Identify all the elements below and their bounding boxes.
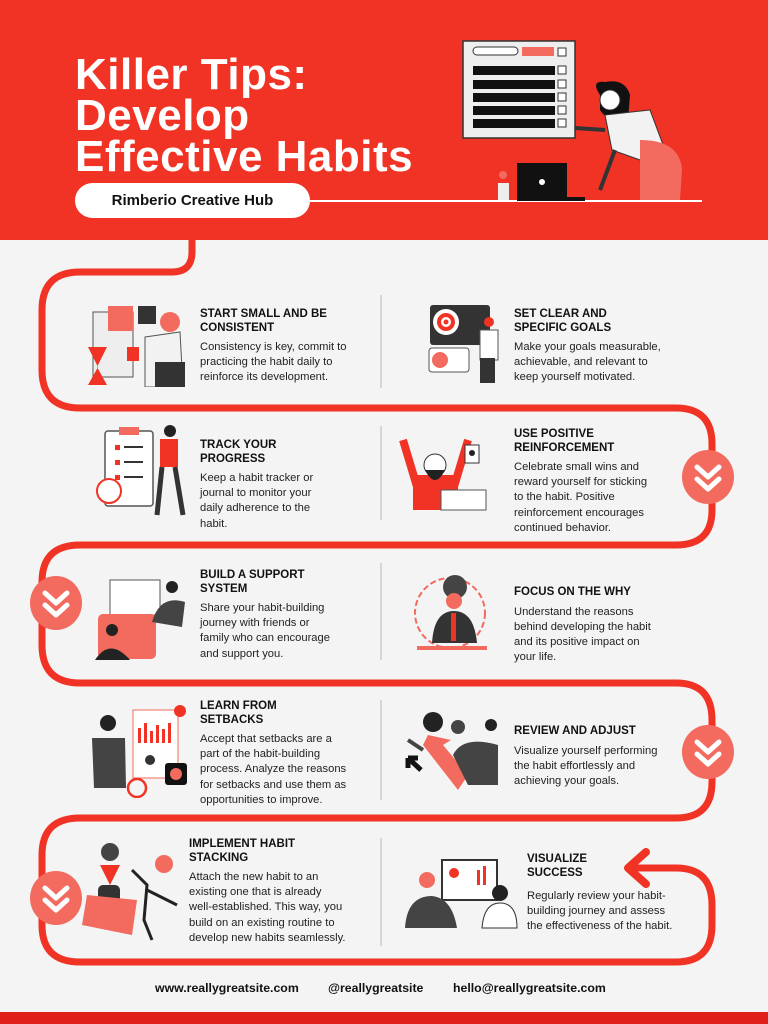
header illustration: woman with checklist board: [310, 40, 702, 202]
footer contacts: @reallygreatsite: [328, 981, 423, 995]
tip: visualize success: Regularly review your habit-: [527, 890, 666, 902]
subtitle pill: Rimberio Creative Hub: [112, 192, 273, 209]
subtitle pill: [75, 183, 310, 218]
tip: review and adjust: [514, 725, 657, 787]
footer contacts: [155, 981, 606, 995]
title: Killer Tips:: [75, 50, 308, 99]
tip: start small: reinforce its development.: [200, 371, 328, 383]
illustration: review and adjust: [406, 712, 498, 790]
tip: track progress: PROGRESS: [200, 452, 265, 464]
tip: support system: and support you.: [200, 648, 283, 660]
tip: positive reinforcement: REINFORCEMENT: [514, 442, 614, 454]
tip: visualize success: the effectiveness of the habit.: [527, 920, 672, 932]
tip: review and adjust: Visualize yourself performing: [514, 744, 657, 756]
tip: positive reinforcement: continued behavior.: [514, 522, 611, 534]
tip: focus on why: your life.: [514, 651, 556, 663]
footer contacts: hello@reallygreatsite.com: [453, 981, 606, 995]
tip: review and adjust: REVIEW AND ADJUST: [514, 725, 636, 737]
tip: track progress: [200, 439, 314, 530]
tip: support system: family who can encourage: [200, 632, 330, 644]
tip: positive reinforcement: USE POSITIVE: [514, 428, 594, 440]
title: Develop: [75, 91, 250, 140]
tip: positive reinforcement: to the habit. Positive: [514, 491, 615, 503]
icon: chevron circle 3: [682, 725, 734, 779]
tip: learn from setbacks: opportunities to improve.: [200, 794, 323, 806]
tip: support system: Share your habit-building: [200, 602, 324, 614]
icon: chevron circle 1: [682, 450, 734, 504]
tip: review and adjust: achieving your goals.: [514, 775, 619, 787]
tip: support system: BUILD A SUPPORT: [200, 569, 305, 581]
tip: habit stacking: well-established. This way, you: [189, 901, 342, 913]
tip: focus on why: and its positive impact on: [514, 636, 640, 648]
tip: set clear goals: achievable, and relevant to: [514, 356, 648, 368]
tip: habit stacking: build on an existing routine to: [189, 917, 335, 929]
tip: support system: [200, 569, 330, 660]
tip: track progress: journal to monitor your: [200, 487, 311, 499]
tip: set clear goals: SPECIFIC GOALS: [514, 322, 611, 334]
tip: set clear goals: SET CLEAR AND: [514, 308, 607, 320]
tip: start small: CONSISTENT: [200, 322, 274, 334]
tip: track progress: Keep a habit tracker or: [200, 472, 313, 484]
tip: learn from setbacks: LEARN FROM: [200, 700, 277, 712]
illustration: support system: [95, 580, 185, 660]
tip: focus on why: [514, 586, 651, 663]
tip: learn from setbacks: for setbacks and use them as: [200, 779, 346, 791]
tip: habit stacking: Attach the new habit to an: [189, 871, 318, 883]
title: Effective Habits: [75, 132, 413, 181]
tip: learn from setbacks: [200, 700, 346, 806]
illustration: track progress: [96, 425, 186, 516]
header background: [0, 0, 768, 240]
tip: habit stacking: IMPLEMENT HABIT: [189, 838, 295, 850]
illustration: set clear goals: [428, 305, 498, 383]
tip: start small: Consistency is key, commit to: [200, 341, 347, 353]
tip: positive reinforcement: [514, 428, 647, 534]
tip: focus on why: FOCUS ON THE WHY: [514, 586, 631, 598]
illustration: visualize success: [405, 859, 518, 928]
tip: visualize success: VISUALIZE: [527, 853, 587, 865]
icon: chevron circle 2: [30, 576, 82, 630]
tip: visualize success: [527, 853, 672, 932]
tip: focus on why: Understand the reasons: [514, 606, 633, 618]
tip: set clear goals: [514, 308, 661, 383]
tip: focus on why: behind developing the habit: [514, 621, 651, 633]
footer bar: [0, 1012, 768, 1024]
tip: set clear goals: Make your goals measurable,: [514, 341, 661, 353]
tip: learn from setbacks: Accept that setbacks are a: [200, 733, 332, 745]
tip: visualize success: SUCCESS: [527, 866, 583, 878]
illustration: positive reinforcement: [399, 438, 486, 510]
title: [75, 50, 413, 181]
tip: support system: SYSTEM: [200, 582, 247, 594]
tip: positive reinforcement: reinforcement encourages: [514, 507, 644, 519]
illustration: start small: [88, 306, 185, 387]
tip: support system: journey with friends or: [200, 617, 309, 629]
tip: habit stacking: develop new habits seamlessly.: [189, 932, 346, 944]
tip: set clear goals: keep yourself motivated.: [514, 371, 635, 383]
icon: chevron circle 4: [30, 871, 82, 925]
tip: visualize success: building journey and assess: [527, 905, 665, 917]
tip: habit stacking: STACKING: [189, 852, 248, 864]
tip: learn from setbacks: process. Analyze the reasons: [200, 763, 346, 775]
illustration: focus on the why: [414, 575, 487, 650]
tip: positive reinforcement: reward yourself for sticking: [514, 476, 647, 488]
illustration: habit stacking: [82, 843, 178, 940]
tip: start small: practicing the habit daily to: [200, 356, 332, 368]
footer contacts: www.reallygreatsite.com: [155, 981, 299, 995]
tip: start small: START SMALL AND BE: [200, 308, 327, 320]
tip: track progress: daily adherence to the: [200, 502, 310, 514]
tip: review and adjust: the habit effortlessly and: [514, 760, 635, 772]
tip: habit stacking: [189, 838, 346, 944]
tip: track progress: TRACK YOUR: [200, 439, 276, 451]
tip: learn from setbacks: SETBACKS: [200, 714, 263, 726]
tip: habit stacking: existing one that is already: [189, 886, 321, 898]
illustration: learn from setbacks: [92, 705, 187, 798]
tip: learn from setbacks: part of the habit-building: [200, 748, 320, 760]
tip: positive reinforcement: Celebrate small wins and: [514, 461, 639, 473]
tip: track progress: habit.: [200, 518, 227, 530]
tip: start small: [200, 308, 347, 383]
